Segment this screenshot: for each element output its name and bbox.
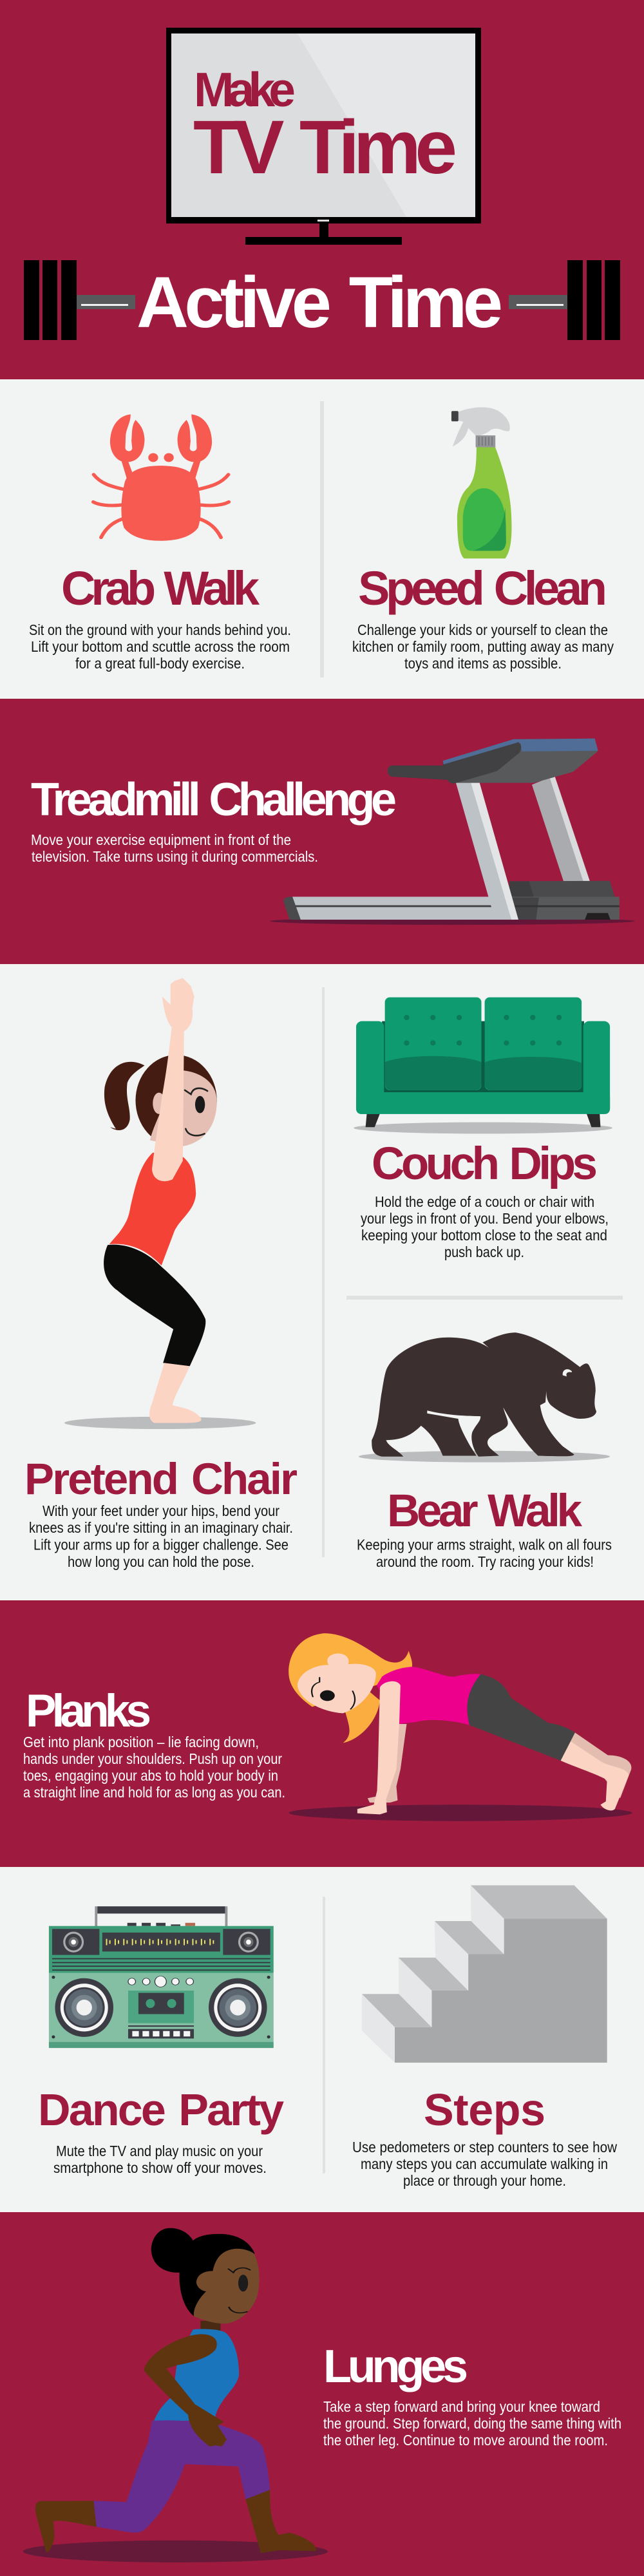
text: treadmill description xyxy=(31,831,318,865)
text: pretend chair description: Lift your arms up for a bigger challenge. See xyxy=(33,1537,289,1553)
panel: crab walk and speed clean xyxy=(0,379,644,699)
text: speed clean description xyxy=(352,621,614,672)
heading: Speed Clean: Speed Clean xyxy=(358,562,607,615)
heading: Steps: Steps xyxy=(424,2085,545,2135)
illustration: woman doing lunge xyxy=(23,2228,328,2562)
icon: television xyxy=(166,28,481,245)
text: dance party description: smartphone to show off your moves. xyxy=(53,2159,267,2176)
icon: crab xyxy=(93,414,229,541)
icon: treadmill xyxy=(270,739,634,925)
text: planks description: hands under your shoulders. Push up on your xyxy=(23,1750,282,1767)
text: crab walk description: Sit on the ground with your hands behind you. xyxy=(29,621,291,638)
illustration: woman in chair pose xyxy=(64,978,256,1429)
text: speed clean description: toys and items as possible. xyxy=(404,655,562,672)
text: pretend chair description xyxy=(29,1502,293,1570)
text: speed clean description: kitchen or family room, putting away as many xyxy=(352,638,614,655)
icon: barbell left xyxy=(24,260,135,340)
panel: header xyxy=(0,0,644,379)
text: steps description: Use pedometers or step counters to see how xyxy=(352,2139,617,2155)
text: couch dips description: your legs in front of you. Bend your elbows, xyxy=(361,1210,609,1227)
text: steps description xyxy=(352,2139,617,2189)
text: couch dips description: push back up. xyxy=(444,1244,524,1260)
text: pretend chair description: how long you can hold the pose. xyxy=(68,1553,254,1570)
text: steps description: place or through your home. xyxy=(403,2172,566,2189)
text: crab walk description: Lift your bottom and scuttle across the room xyxy=(31,638,290,655)
text: dance party description xyxy=(53,2143,267,2176)
panel: dance party and steps xyxy=(0,1867,644,2212)
heading: Lunges: Lunges xyxy=(323,2341,468,2392)
text: bear walk description xyxy=(357,1537,612,1570)
panel: pretend chair, couch dips, bear walk xyxy=(0,964,644,1600)
text: couch dips description: Hold the edge of a couch or chair with xyxy=(375,1193,594,1210)
title: Active Time: Active Time xyxy=(137,262,503,343)
heading: Crab Walk: Crab Walk xyxy=(61,562,260,615)
text: treadmill description: Move your exercise equipment in front of the xyxy=(31,831,291,848)
icon: spray bottle xyxy=(451,407,511,558)
text: couch dips description xyxy=(361,1193,609,1260)
text: pretend chair description: With your feet under your hips, bend your xyxy=(43,1502,279,1519)
text: bear walk description: around the room. Try racing your kids! xyxy=(376,1553,594,1570)
illustration: woman in plank xyxy=(289,1633,632,1821)
text: pretend chair description: knees as if you're sitting in an imaginary chair. xyxy=(29,1519,293,1536)
heading: Planks: Planks xyxy=(26,1686,151,1737)
text: planks description: a straight line and hold for as long as you can. xyxy=(23,1784,285,1801)
text: crab walk description: for a great full-body exercise. xyxy=(75,655,245,672)
text: planks description: toes, engaging your abs to hold your body in xyxy=(23,1767,278,1784)
text: treadmill description: television. Take turns using it during commercials. xyxy=(32,848,318,865)
panel: treadmill challenge xyxy=(0,699,644,964)
title: TV Time: TV Time xyxy=(193,105,457,190)
text: crab walk description xyxy=(29,621,291,672)
illustration: couch xyxy=(354,998,612,1133)
text: planks description: Get into plank position – lie facing down, xyxy=(23,1734,259,1750)
illustration: stairs xyxy=(362,1886,607,2063)
text: couch dips description: keeping your bottom close to the seat and xyxy=(361,1227,607,1244)
text: bear walk description: Keeping your arms straight, walk on all fours xyxy=(357,1537,612,1553)
panel: planks xyxy=(0,1600,644,1867)
text: planks description xyxy=(23,1734,285,1801)
heading: Treadmill Challenge: Treadmill Challenge xyxy=(31,774,397,826)
text: speed clean description: Challenge your kids or yourself to clean the xyxy=(357,621,608,638)
heading: Couch Dips: Couch Dips xyxy=(372,1139,598,1189)
heading: Pretend Chair: Pretend Chair xyxy=(24,1454,298,1504)
text: lunges description xyxy=(323,2398,621,2448)
illustration: boombox xyxy=(49,1906,274,2048)
heading: Dance Party: Dance Party xyxy=(38,2085,284,2135)
text: dance party description: Mute the TV and play music on your xyxy=(56,2143,263,2159)
title: Make: Make xyxy=(194,62,296,117)
illustration: bear xyxy=(359,1332,610,1463)
text: lunges description: Take a step forward and bring your knee toward xyxy=(323,2398,600,2415)
icon: barbell right xyxy=(509,260,620,340)
panel: lunges xyxy=(0,2212,644,2576)
heading: Bear Walk: Bear Walk xyxy=(387,1486,582,1537)
text: steps description: many steps you can accumulate walking in xyxy=(361,2155,608,2172)
text: lunges description: the other leg. Continue to move around the room. xyxy=(323,2432,608,2448)
